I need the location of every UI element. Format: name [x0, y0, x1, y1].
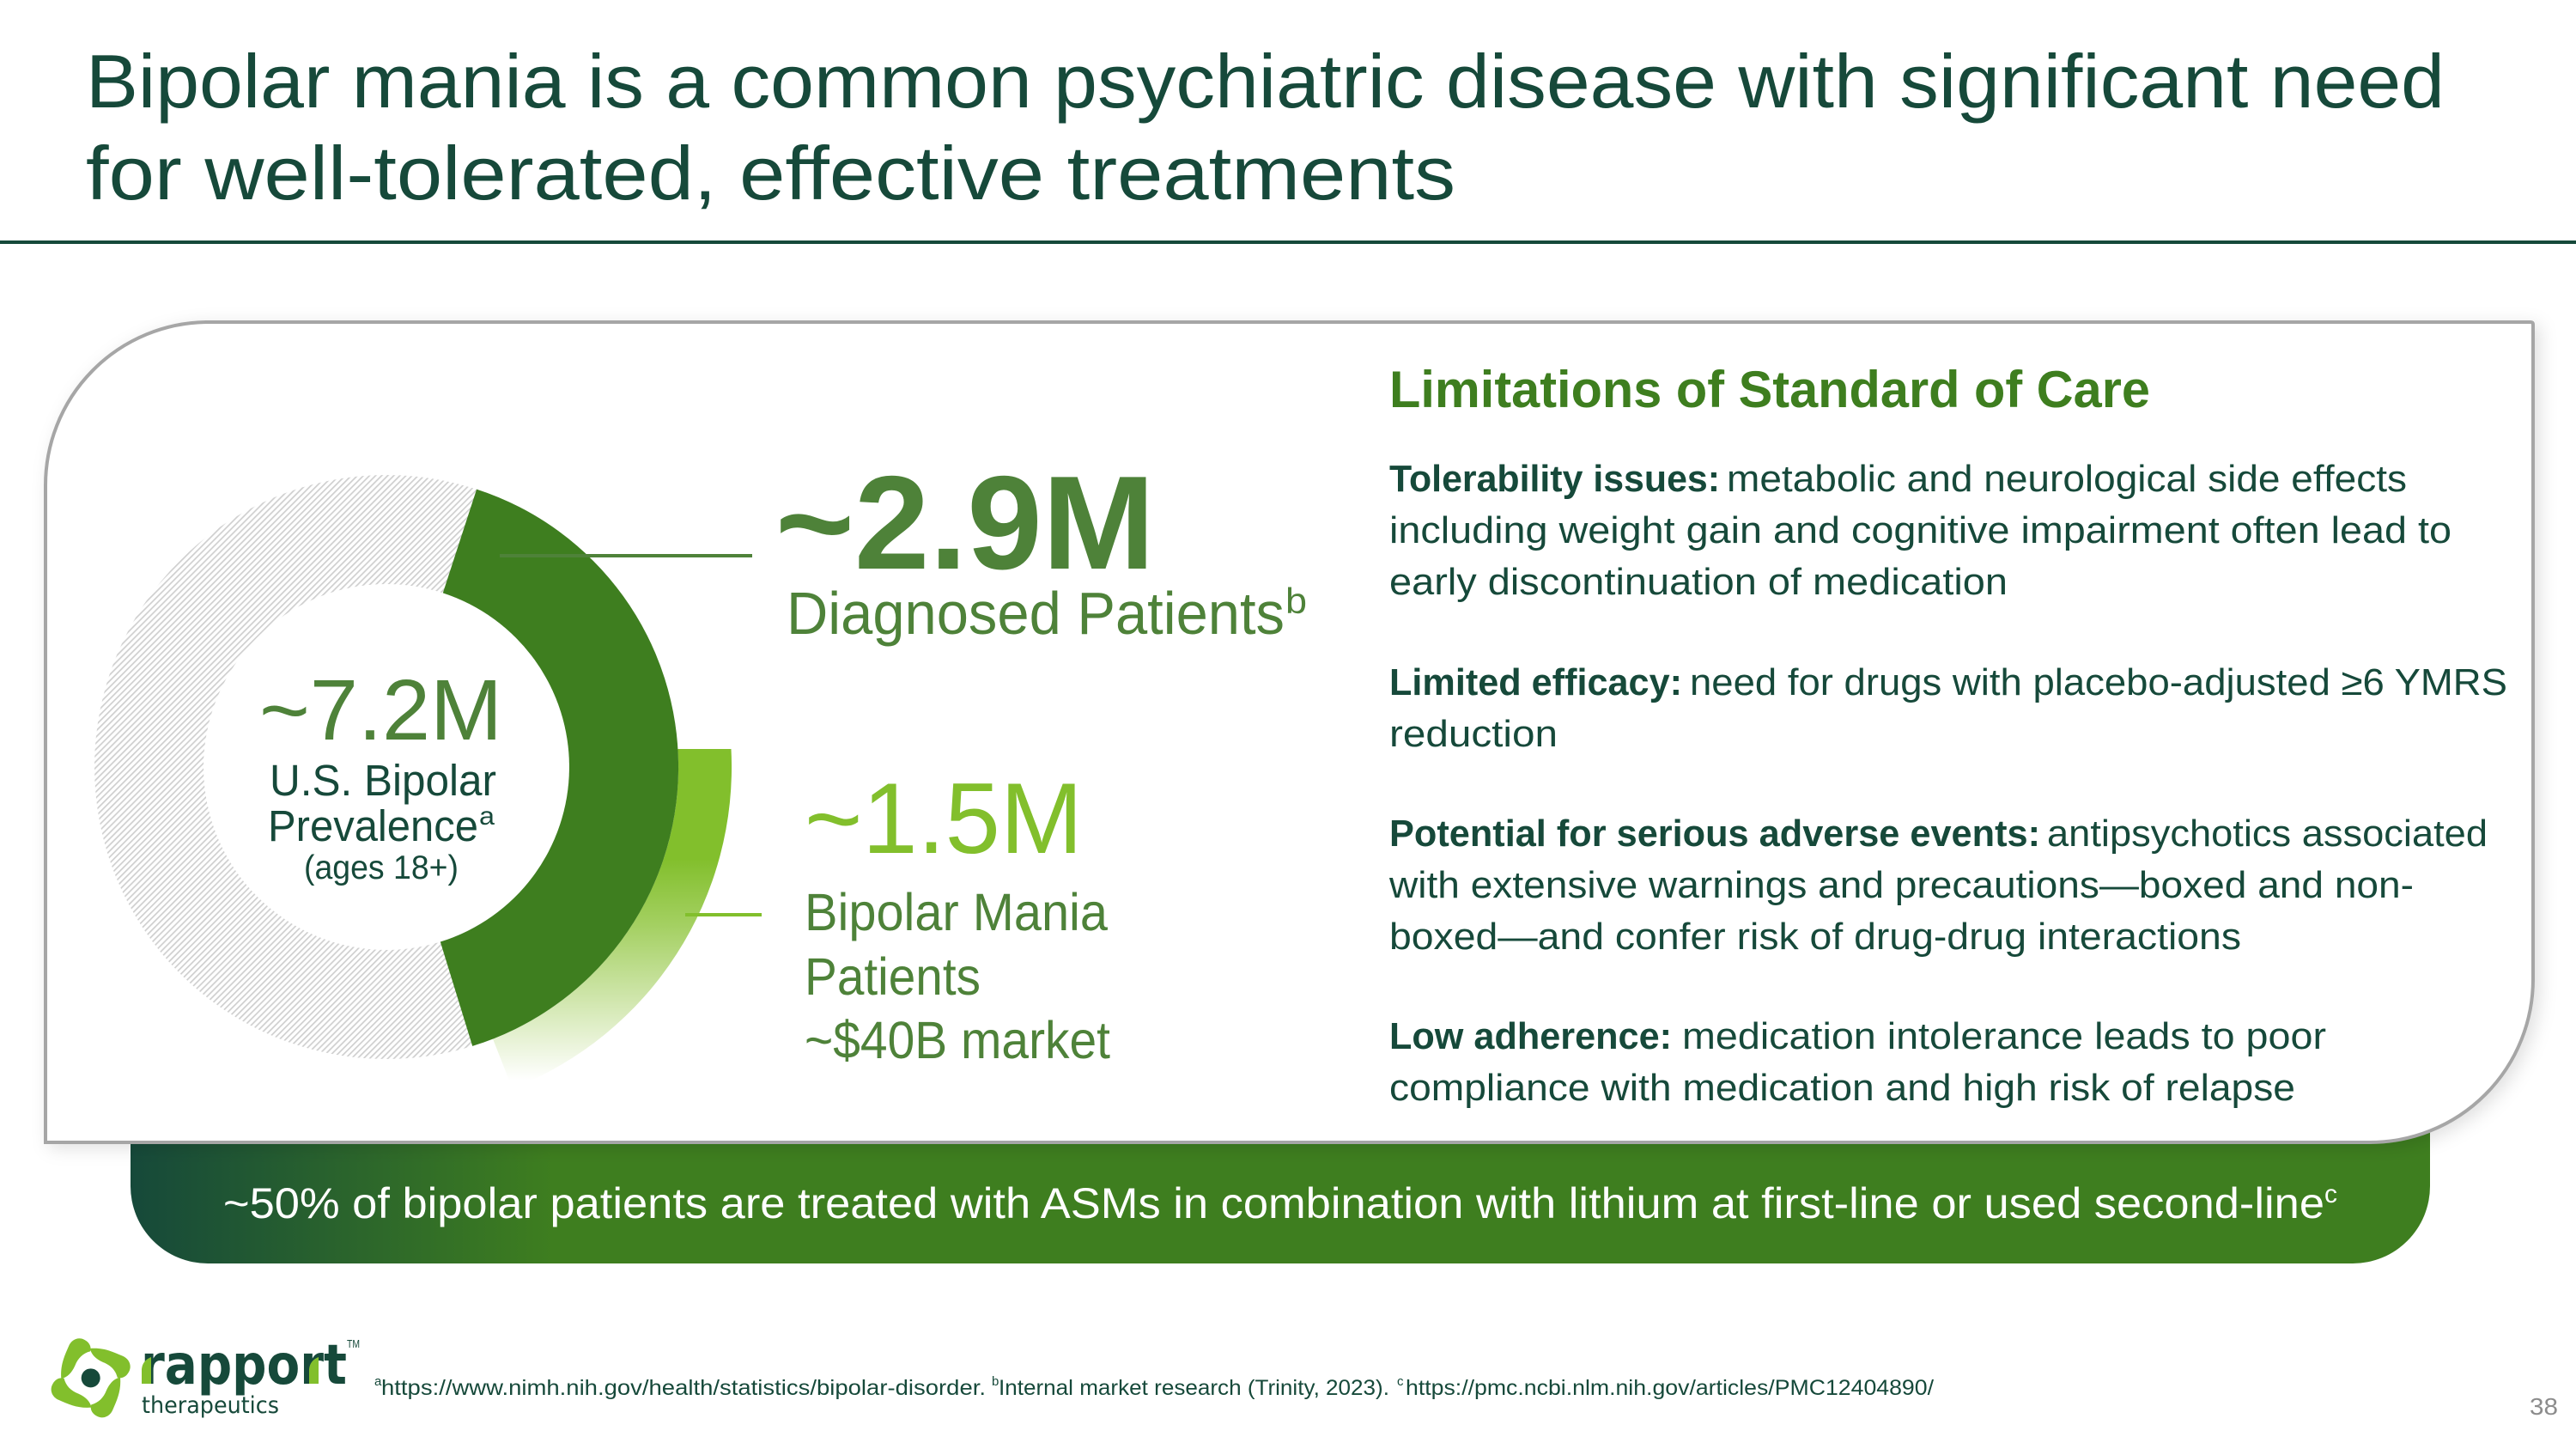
title rule	[0, 240, 2576, 244]
donut center text: (ages 18+)	[304, 849, 459, 886]
text block: potential for serious adverse events: antipsychotics associated	[2047, 813, 2488, 855]
text block: tolerability issues: metabolic and neurological side effects	[1727, 458, 2407, 500]
donut center text	[259, 662, 502, 886]
text block: low adherence	[1389, 1015, 2326, 1109]
footnotes: https://pmc.ncbi.nlm.nih.gov/articles/PMC12404890/	[1406, 1376, 1934, 1400]
wordmark accents	[142, 1357, 319, 1384]
footnotes: b	[992, 1374, 999, 1389]
footnotes: https://www.nimh.nih.gov/health/statistics/bipolar-disorder.	[381, 1376, 986, 1400]
footnotes: c	[1397, 1374, 1404, 1389]
stat: 2.9M diagnosed patients: ~2.9M	[775, 448, 1155, 597]
text block: tolerability issues: including weight gain and cognitive impairment often lead to	[1389, 509, 2451, 551]
hatched remainder ring	[94, 475, 678, 1059]
text block: low adherence: compliance with medication and high risk of relapse	[1389, 1067, 2295, 1109]
logo: rapport therapeutics: TM	[347, 1337, 360, 1350]
text block: tolerability issues: Tolerability issues:	[1389, 458, 1720, 500]
stat: 2.9M diagnosed patients	[775, 448, 1307, 647]
stat: 1.5M bipolar mania patients	[805, 762, 1110, 1069]
text block: tolerability issues	[1389, 458, 2451, 603]
text block: low adherence: medication intolerance leads to poor	[1682, 1015, 2326, 1057]
heading: limitations of standard of care: Limitations of Standard of Care	[1389, 361, 2150, 418]
footnotes: Internal market research (Trinity, 2023).	[999, 1376, 1389, 1400]
connector line: bipolar mania	[685, 913, 762, 916]
page number: 38	[2530, 1393, 2558, 1420]
banner: ASM treatment statement: c	[2324, 1180, 2337, 1209]
donut chart: U.S. bipolar prevalence	[94, 475, 732, 1088]
stat: 1.5M bipolar mania patients: ~1.5M	[805, 762, 1083, 874]
icon: rapport mark	[52, 1338, 131, 1417]
diagnosed patients arc	[440, 490, 678, 1046]
banner: ASM treatment statement: ~50% of bipolar patients are treated with ASMs in combination with lithium at first-line or used second-line	[223, 1179, 2324, 1227]
text block: limited efficacy	[1389, 661, 2507, 755]
stat: 1.5M bipolar mania patients: ~$40B market	[805, 1011, 1110, 1069]
main panel card	[46, 322, 2533, 1142]
connector line: diagnosed patients	[500, 554, 752, 557]
text block: potential for serious adverse events	[1388, 813, 2488, 958]
footnotes: a	[374, 1374, 382, 1389]
text block: potential for serious adverse events: with extensive warnings and precautions—boxed and non-	[1388, 864, 2414, 906]
title: Bipolar mania is a common psychiatric disease with significant need	[86, 39, 2445, 124]
text block: limited efficacy: reduction	[1389, 713, 1558, 755]
donut center text: a	[479, 802, 495, 831]
logo: rapport therapeutics: therapeutics	[142, 1392, 279, 1419]
text block: limited efficacy: need for drugs with placebo-adjusted ≥6 YMRS	[1690, 661, 2507, 703]
footnotes	[374, 1374, 1934, 1400]
text block: low adherence: Low adherence:	[1389, 1015, 1672, 1057]
title	[86, 39, 2445, 216]
bipolar mania arc	[493, 749, 732, 1088]
logo: rapport therapeutics	[52, 1334, 360, 1419]
donut center text: Prevalence	[268, 801, 478, 850]
text block: limited efficacy: Limited efficacy:	[1389, 661, 1682, 703]
text block: tolerability issues: early discontinuation of medication	[1389, 561, 2008, 603]
text block: potential for serious adverse events: boxed—and confer risk of drug-drug interactions	[1389, 916, 2241, 958]
title: for well-tolerated, effective treatments	[86, 131, 1455, 216]
stat: 2.9M diagnosed patients: Diagnosed Patients	[787, 580, 1285, 647]
donut center text: U.S. Bipolar	[270, 756, 496, 805]
stat: 1.5M bipolar mania patients: Patients	[805, 947, 981, 1006]
stat: 2.9M diagnosed patients: b	[1285, 581, 1307, 621]
donut center text: ~7.2M	[259, 662, 502, 758]
stat: 1.5M bipolar mania patients: Bipolar Mania	[805, 883, 1108, 941]
wordmark: rapport	[141, 1334, 347, 1397]
banner: ASM treatment statement	[131, 1108, 2430, 1263]
text block: potential for serious adverse events: Potential for serious adverse events:	[1389, 813, 2040, 855]
